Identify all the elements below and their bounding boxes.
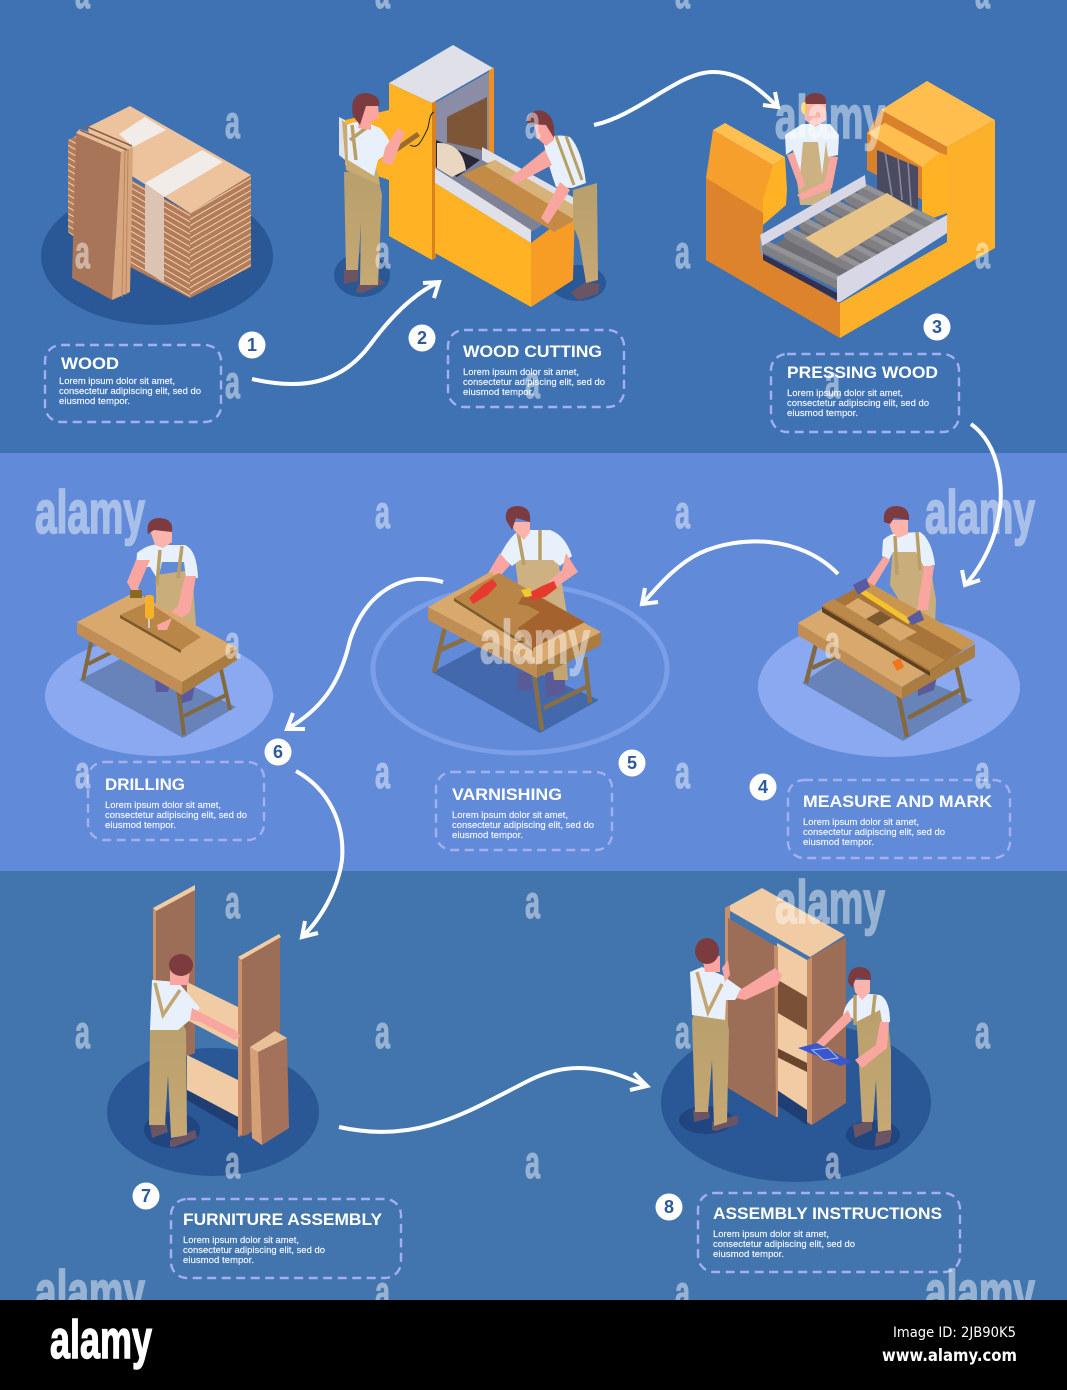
number badge 4	[750, 774, 776, 800]
text block: pressing wood: consectetur adipiscing elit, sed do	[787, 398, 929, 408]
watermark tiles: a	[675, 226, 690, 278]
number badge 4: 4	[758, 777, 768, 797]
watermark tiles: alamy	[775, 869, 885, 936]
watermark tiles: a	[525, 876, 540, 928]
watermark tiles: alamy	[480, 609, 590, 676]
background band: middle	[0, 453, 1067, 871]
watermark tiles: a	[375, 1006, 390, 1058]
watermark tiles: a	[75, 1006, 90, 1058]
heading: measure and mark: MEASURE AND MARK	[803, 792, 993, 811]
number badge 2: 2	[417, 328, 427, 348]
watermark tiles: a	[975, 226, 990, 278]
text block: measure and mark: Lorem ipsum dolor sit amet,	[803, 817, 919, 827]
text block: measure and mark: eiusmod tempor.	[803, 837, 874, 847]
watermark tiles: a	[225, 96, 240, 148]
number badge 5: 5	[627, 753, 637, 773]
heading: wood cutting: WOOD CUTTING	[463, 342, 602, 361]
heading: furniture assembly: FURNITURE ASSEMBLY	[183, 1210, 383, 1229]
panel: wood cutting	[448, 330, 624, 407]
text block: wood	[59, 376, 201, 406]
watermark tiles: a	[675, 1266, 690, 1318]
illustration: measuring at workbench	[758, 506, 1020, 757]
watermark tiles: a	[975, 746, 990, 798]
worker: right at saw	[510, 110, 600, 300]
illustration: furniture assembly with worker	[107, 885, 319, 1176]
watermark tiles: a	[525, 96, 540, 148]
text block: furniture assembly: eiusmod tempor.	[183, 1255, 254, 1265]
watermark tiles: a	[375, 1266, 390, 1318]
worker: varnishing	[484, 506, 578, 698]
watermark tiles: a	[375, 486, 390, 538]
watermark tiles: a	[225, 616, 240, 668]
arrow: step 6 to 7	[296, 771, 342, 937]
watermark tiles: a	[825, 616, 840, 668]
text block: drilling: eiusmod tempor.	[105, 820, 176, 830]
arrow: step 1 to 2	[252, 282, 439, 384]
watermark tiles: a	[525, 1136, 540, 1188]
text block: pressing wood	[787, 388, 929, 418]
illustration: drilling at workbench	[45, 518, 273, 756]
worker: left at saw	[342, 93, 405, 293]
text block: varnishing: consectetur adipiscing elit, sed do	[452, 820, 594, 830]
text block: drilling: Lorem ipsum dolor sit amet,	[105, 800, 221, 810]
number badge 7: 7	[141, 1186, 151, 1206]
watermark tiles: a	[675, 1006, 690, 1058]
watermark tiles: a	[675, 486, 690, 538]
arrow: step 2 to 3	[594, 72, 778, 125]
illustration: wood cutting machine with two workers	[334, 45, 606, 307]
watermark tiles: a	[75, 746, 90, 798]
background band: top	[0, 0, 1067, 453]
text block: pressing wood: Lorem ipsum dolor sit amet,	[787, 388, 903, 398]
watermark tiles: a	[825, 1136, 840, 1188]
worker: drilling	[127, 518, 198, 640]
number badge 1: 1	[247, 335, 257, 355]
watermark tiles: alamy	[35, 479, 145, 546]
icon: blueprint	[798, 1043, 852, 1066]
heading: assembly instructions: ASSEMBLY INSTRUCTIONS	[713, 1204, 942, 1223]
text block: furniture assembly: Lorem ipsum dolor sit amet,	[183, 1235, 299, 1245]
text block: assembly instructions: consectetur adipiscing elit, sed do	[713, 1239, 855, 1249]
arrow: step 5 to 6	[287, 579, 443, 729]
panel: measure and mark	[788, 780, 1010, 858]
text block: furniture assembly: consectetur adipiscing elit, sed do	[183, 1245, 325, 1255]
text block: varnishing: Lorem ipsum dolor sit amet,	[452, 810, 568, 820]
illustration: assembled cabinet with two workers	[661, 888, 931, 1182]
text block: wood cutting	[463, 367, 605, 397]
heading: varnishing: VARNISHING	[452, 785, 562, 804]
logo: alamy: alamy	[50, 1310, 152, 1370]
text block: measure and mark: consectetur adipiscing elit, sed do	[803, 827, 945, 837]
text block: wood: eiusmod tempor.	[59, 396, 130, 406]
text block: varnishing: eiusmod tempor.	[452, 830, 523, 840]
number badge 8: 8	[664, 1197, 674, 1217]
background band: bottom	[0, 871, 1067, 1300]
text block: measure and mark	[803, 817, 945, 847]
panel: furniture assembly	[171, 1199, 401, 1278]
text block: pressing wood: eiusmod tempor.	[787, 408, 858, 418]
watermark tiles: a	[375, 746, 390, 798]
watermark tiles: a	[75, 226, 90, 278]
number badge 1	[238, 332, 266, 358]
text block: furniture assembly	[183, 1235, 325, 1265]
heading: pressing wood: PRESSING WOOD	[787, 363, 938, 382]
number badge 8	[656, 1194, 682, 1220]
watermark tiles: a	[225, 1136, 240, 1188]
panel: wood	[45, 345, 221, 422]
panel: drilling	[88, 762, 264, 840]
text block: wood cutting: eiusmod tempor.	[463, 387, 534, 397]
panel: pressing wood	[771, 354, 959, 432]
website: www.alamy.com	[882, 1346, 1017, 1366]
watermark tiles: a	[975, 1006, 990, 1058]
text block: assembly instructions: eiusmod tempor.	[713, 1249, 784, 1259]
icon: red gloves	[469, 579, 557, 604]
watermark tiles: a	[375, 226, 390, 278]
heading: wood: WOOD	[61, 354, 119, 373]
number badge 2	[408, 324, 436, 352]
image id: Image ID: 2JB90K5	[893, 1325, 1016, 1341]
text block: drilling: consectetur adipiscing elit, sed do	[105, 810, 247, 820]
watermark tiles: a	[525, 356, 540, 408]
worker: right with blueprint	[798, 967, 892, 1147]
panel: assembly instructions	[698, 1193, 960, 1272]
watermark tiles: a	[675, 746, 690, 798]
number badge 6	[264, 738, 292, 766]
panel: varnishing	[436, 772, 612, 850]
text block: wood: consectetur adipiscing elit, sed do	[59, 386, 201, 396]
text block: wood: Lorem ipsum dolor sit amet,	[59, 376, 175, 386]
number badge 7	[132, 1182, 160, 1210]
worker: assembling back view	[149, 954, 240, 1147]
footer bar	[0, 1300, 1067, 1390]
watermark tiles: alamy	[775, 84, 885, 151]
worker: left back view	[690, 938, 782, 1131]
watermark tiles: a	[225, 876, 240, 928]
text block: varnishing	[452, 810, 594, 840]
watermark tiles: a	[825, 356, 840, 408]
worker: press operator	[785, 93, 839, 205]
text block: assembly instructions	[713, 1229, 855, 1259]
arrow: step 3 to 4	[962, 424, 1001, 585]
arrow: step 7 to 8	[339, 1068, 647, 1132]
text block: wood cutting: consectetur adipiscing elit, sed do	[463, 377, 605, 387]
text block: drilling	[105, 800, 247, 830]
illustration: wood stack	[41, 106, 273, 325]
number badge 6: 6	[273, 742, 283, 762]
illustration: varnishing at workbench	[373, 506, 667, 753]
watermark tiles: a	[225, 356, 240, 408]
heading: drilling: DRILLING	[105, 775, 185, 794]
worker: measuring	[864, 506, 936, 625]
number badge 5	[618, 750, 646, 776]
number badge 3	[924, 314, 950, 340]
arrow: step 4 to 5	[642, 541, 838, 604]
watermark tiles: alamy	[35, 1259, 145, 1326]
number badge 3: 3	[932, 317, 942, 337]
illustration: pressing machine with worker	[706, 81, 995, 338]
text block: assembly instructions: Lorem ipsum dolor sit amet,	[713, 1229, 829, 1239]
text block: wood cutting: Lorem ipsum dolor sit amet,	[463, 367, 579, 377]
